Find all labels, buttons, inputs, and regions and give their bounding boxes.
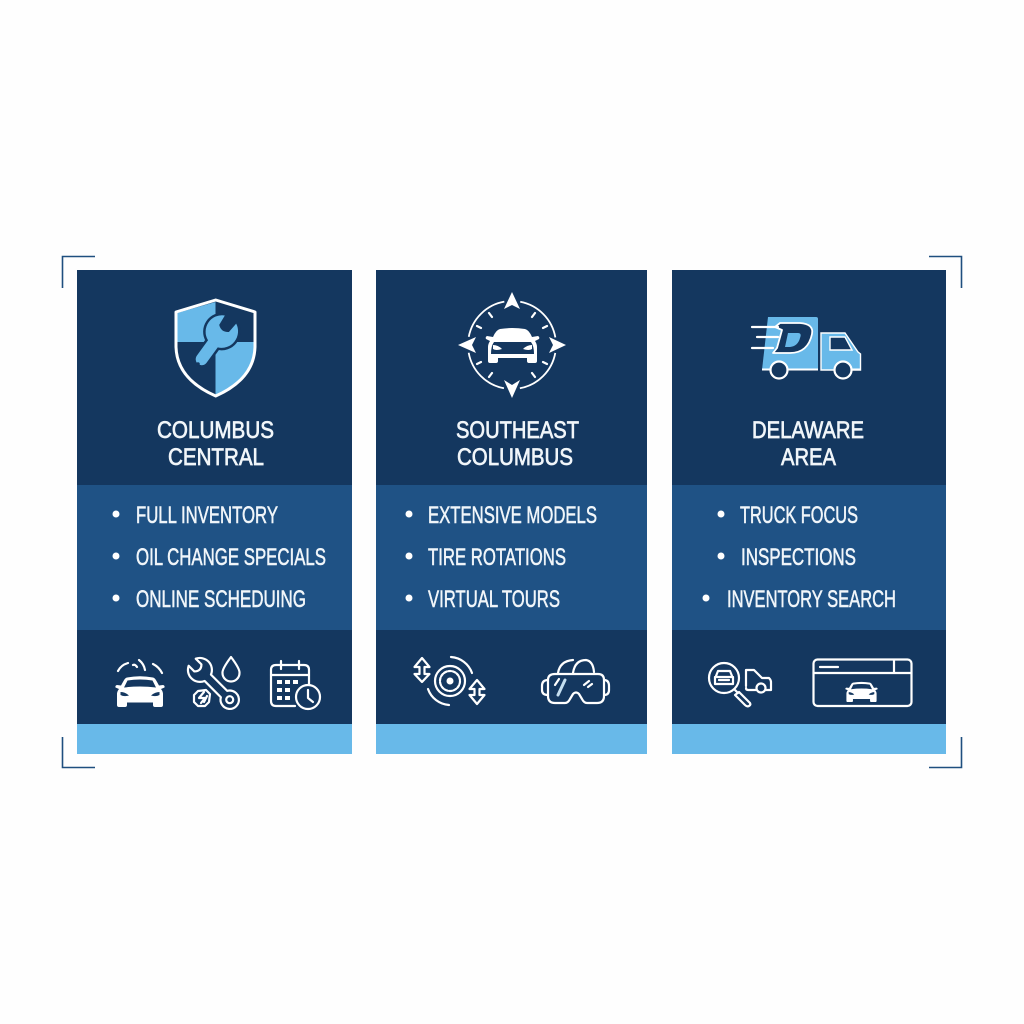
feature list: VIRTUAL TOURS xyxy=(428,586,560,613)
feature list: ONLINE SCHEDUING xyxy=(136,586,306,613)
heading xyxy=(456,417,579,471)
panel: Southeast Columbus xyxy=(376,270,647,754)
heading: DELAWARE xyxy=(752,417,864,444)
icon: VR goggles xyxy=(542,660,609,703)
feature list xyxy=(702,502,896,613)
icon: magnifier with truck xyxy=(709,663,771,706)
icon: browser window with car xyxy=(814,660,912,706)
heading: CENTRAL xyxy=(168,444,264,471)
feature list: INSPECTIONS xyxy=(741,544,856,571)
feature list: TIRE ROTATIONS xyxy=(428,544,566,571)
feature list: FULL INVENTORY xyxy=(136,502,278,529)
feature list xyxy=(112,502,326,613)
corner brackets xyxy=(62,256,962,768)
heading: COLUMBUS xyxy=(457,444,573,471)
heading: SOUTHEAST xyxy=(456,417,579,444)
heading: COLUMBUS xyxy=(157,417,274,444)
icon: car wash xyxy=(115,660,165,707)
feature list: INVENTORY SEARCH xyxy=(727,586,896,613)
feature list: TRUCK FOCUS xyxy=(740,502,858,529)
icon: shield with wrench xyxy=(176,300,255,396)
panel: Columbus Central xyxy=(77,270,352,754)
icon: compass with car xyxy=(458,292,566,398)
feature list: OIL CHANGE SPECIALS xyxy=(136,544,326,571)
heading: AREA xyxy=(781,444,836,471)
icon: delivery truck xyxy=(752,317,860,378)
feature list: EXTENSIVE MODELS xyxy=(428,502,597,529)
panel: Delaware Area xyxy=(672,270,946,754)
heading xyxy=(752,417,864,471)
icon: calendar with clock xyxy=(271,661,320,709)
heading xyxy=(157,417,274,471)
feature list xyxy=(406,502,597,613)
icon: wrench, oil drop and gear xyxy=(184,654,245,715)
icon: tire rotation xyxy=(414,657,484,705)
